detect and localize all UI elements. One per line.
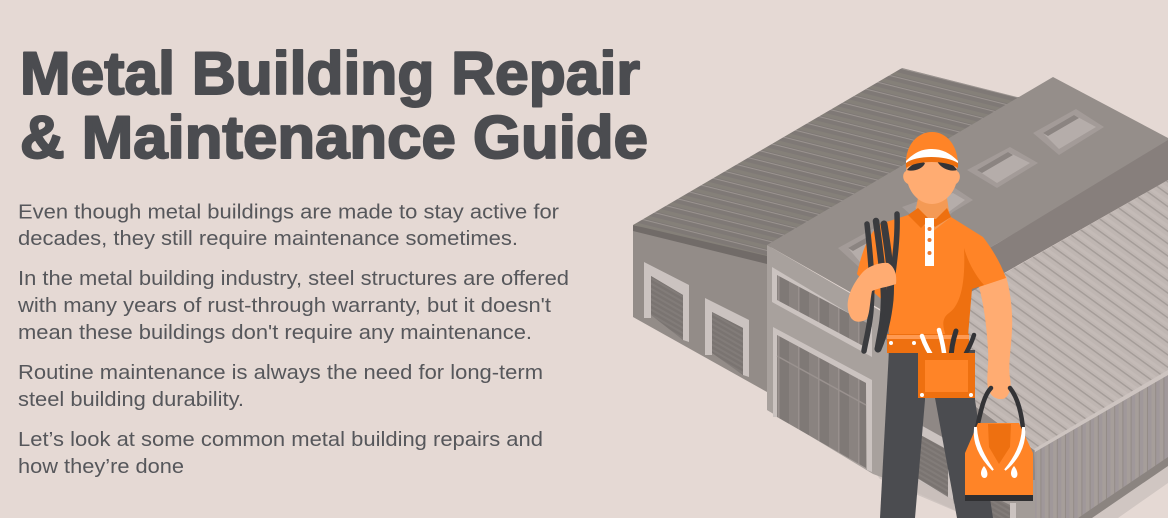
- left hand: [848, 263, 896, 322]
- hair: [907, 160, 957, 171]
- flat roof block: [767, 77, 1168, 309]
- intro text block: [17, 200, 569, 478]
- right arm: [979, 276, 1012, 399]
- pants: [880, 350, 993, 518]
- roof fascia: [880, 140, 1168, 340]
- intro text block: In the metal building industry, steel structures are offered: [18, 267, 569, 290]
- cables: [864, 214, 897, 351]
- garage door 1: [644, 262, 689, 342]
- building illustration: [633, 68, 1168, 518]
- upper window: [772, 267, 872, 357]
- intro text block: decades, they still require maintenance sometimes.: [18, 227, 518, 250]
- intro text block: mean these buildings don't require any maintenance.: [18, 321, 532, 344]
- intro text block: Routine maintenance is always the need for long-term: [18, 361, 543, 384]
- intro text block: with many years of rust-through warranty, but it doesn't: [17, 294, 551, 317]
- tool bag: [965, 388, 1033, 501]
- skylight 1: [1033, 109, 1104, 155]
- tool belt: [887, 334, 969, 353]
- intro text block: how they’re done: [18, 455, 184, 478]
- shirt: [857, 215, 1006, 336]
- pouch: [918, 353, 975, 398]
- corrugated light roof: [960, 180, 1168, 450]
- front facade: [767, 245, 1036, 518]
- title: Metal Building Repair: [20, 40, 640, 107]
- end wall: [1035, 375, 1168, 518]
- title: [20, 40, 648, 171]
- intro text block: Let’s look at some common metal building repairs and: [18, 428, 543, 451]
- ground strips: [633, 315, 1040, 518]
- skylight 2: [967, 147, 1038, 188]
- lower right door: [915, 423, 1016, 518]
- skylight 3: [902, 188, 973, 232]
- tools in pouch: [922, 330, 974, 361]
- back roof: [633, 68, 1040, 262]
- intro text block: steel building durability.: [18, 388, 244, 411]
- skylight 4: [838, 225, 905, 268]
- intro text block: Even though metal buildings are made to stay active for: [18, 200, 559, 224]
- shirt shading: [943, 248, 984, 336]
- collar: [908, 208, 951, 228]
- left wall: [633, 229, 767, 392]
- cap: [906, 132, 958, 168]
- head: [903, 160, 960, 204]
- neck: [914, 198, 950, 232]
- bag handle: [977, 388, 1023, 430]
- large garage door: [773, 327, 872, 472]
- placket: [925, 218, 934, 266]
- garage door 2: [705, 298, 749, 377]
- worker figure: [848, 132, 1033, 518]
- title: & Maintenance Guide: [20, 104, 648, 171]
